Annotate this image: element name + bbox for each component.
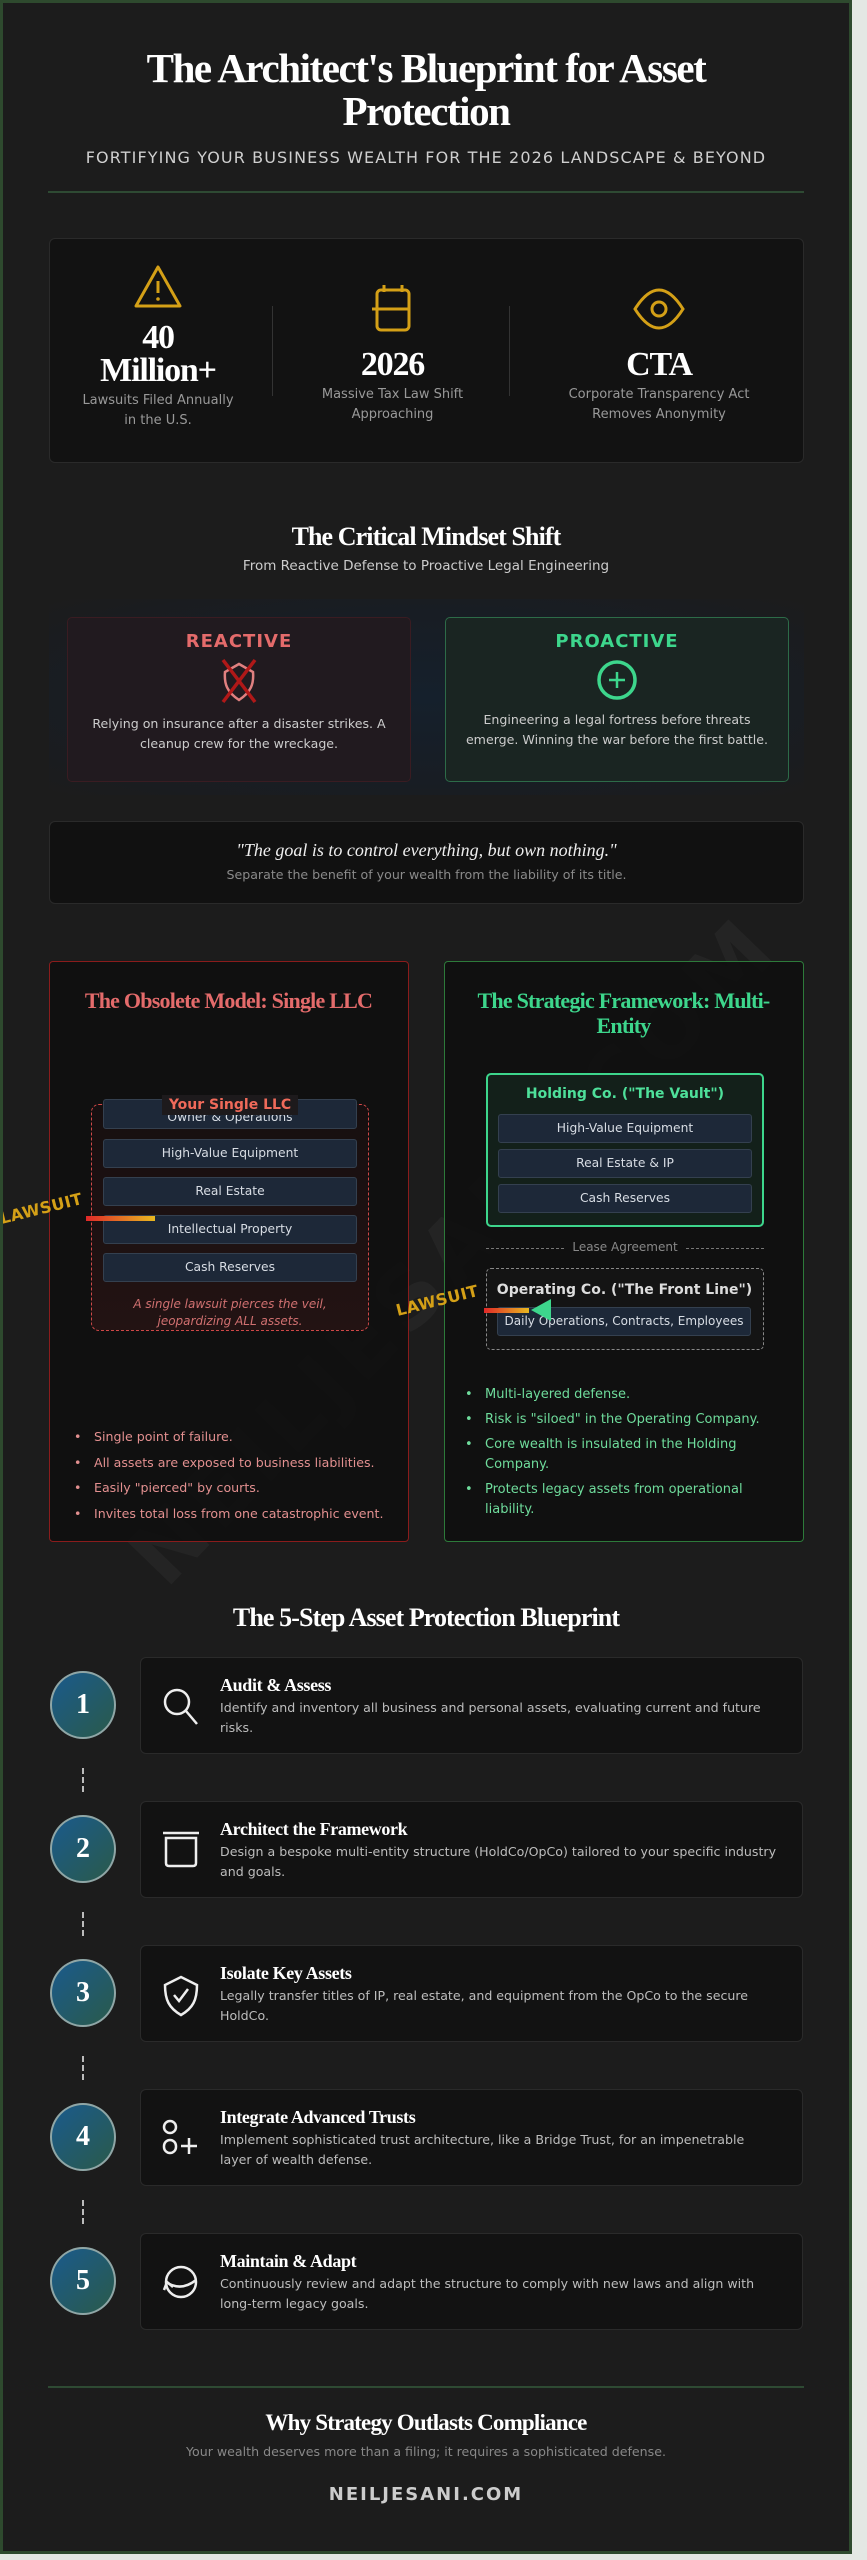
card: reactive: REACTIVE bbox=[186, 631, 292, 652]
card: proactive bbox=[445, 617, 789, 782]
step 3: Isolate Key Assets bbox=[220, 1963, 352, 1983]
icon: frame bbox=[163, 1832, 199, 1868]
callout: quote bbox=[49, 821, 804, 904]
subtitle: FORTIFYING YOUR BUSINESS WEALTH FOR THE 2026 LANDSCAPE & BEYOND bbox=[86, 148, 766, 167]
diagram: single llc: Intellectual Property bbox=[168, 1222, 292, 1236]
step 1: Audit & Assess bbox=[220, 1675, 331, 1695]
arrow: lawsuit left: LAWSUIT bbox=[0, 1189, 84, 1228]
step 4: Implement sophisticated trust architecture, like a Bridge Trust, for an impenetrable bbox=[220, 2132, 744, 2147]
footer subtitle: Your wealth deserves more than a filing; it requires a sophisticated defense. bbox=[186, 2444, 666, 2459]
box: holding co: Holding Co. ("The Vault") bbox=[526, 1086, 724, 1102]
step 5 bbox=[50, 2233, 803, 2330]
step 3: 3 bbox=[76, 1977, 90, 2008]
heading: strategic: The Strategic Framework: Multi- bbox=[478, 988, 769, 1013]
card: reactive: cleanup crew for the wreckage. bbox=[140, 736, 338, 751]
stat: CTA: Removes Anonymity bbox=[592, 407, 726, 422]
arrow: lawsuit left bbox=[0, 1189, 155, 1228]
icon: trust nodes bbox=[162, 2120, 197, 2154]
subheading: mindset: From Reactive Defense to Proactive Legal Engineering bbox=[243, 558, 609, 574]
caption: A single lawsuit pierces the veil, bbox=[133, 1297, 327, 1311]
box: holding co: Cash Reserves bbox=[580, 1191, 670, 1205]
title: Protection bbox=[342, 88, 510, 134]
step 3: HoldCo. bbox=[220, 2008, 269, 2023]
step 1: Identify and inventory all business and personal assets, evaluating current and future bbox=[220, 1700, 761, 1715]
diagram: single llc: Owner & Operations bbox=[167, 1110, 293, 1124]
heading: mindset: The Critical Mindset Shift bbox=[292, 522, 560, 551]
stat: lawsuits bbox=[82, 265, 234, 428]
box: holding co: High-Value Equipment bbox=[557, 1121, 693, 1135]
heading: 5-step: The 5-Step Asset Protection Blueprint bbox=[233, 1603, 619, 1632]
panel: stats bbox=[49, 238, 804, 463]
box: operating co bbox=[486, 1268, 764, 1350]
icon: eye bbox=[633, 288, 685, 330]
step 1 bbox=[50, 1657, 803, 1754]
step 5: 5 bbox=[76, 2265, 90, 2296]
title bbox=[147, 45, 707, 134]
card: proactive: emerge. Winning the war before the first battle. bbox=[466, 732, 768, 747]
bullets: strategic: Multi-layered defense. bbox=[485, 1387, 630, 1402]
bullets: strategic: liability. bbox=[485, 1502, 534, 1517]
step 2 bbox=[50, 1801, 803, 1898]
diagram: single llc: Real Estate bbox=[195, 1184, 265, 1198]
bullets: obsolete: Easily "pierced" by courts. bbox=[94, 1480, 260, 1495]
step 2: Architect the Framework bbox=[220, 1819, 407, 1839]
icon: calendar bbox=[372, 285, 410, 332]
icon: shield check bbox=[164, 1976, 198, 2016]
title: The Architect's Blueprint for Asset bbox=[147, 45, 705, 91]
step 2: 2 bbox=[76, 1833, 90, 1864]
step 4: layer of wealth defense. bbox=[220, 2152, 372, 2167]
stat: CTA: CTA bbox=[626, 346, 692, 383]
step 2: Design a bespoke multi-entity structure (HoldCo/OpCo) tailored to your specific industry bbox=[220, 1844, 776, 1859]
box: operating co: Operating Co. ("The Front Line") bbox=[497, 1282, 752, 1298]
heading: strategic: Entity bbox=[596, 1013, 651, 1038]
stat: CTA: Corporate Transparency Act bbox=[569, 387, 749, 402]
footer heading: Why Strategy Outlasts Compliance bbox=[265, 2410, 587, 2435]
bullets: strategic: Company. bbox=[485, 1457, 549, 1472]
callout: quote: "The goal is to control everything, but own nothing." bbox=[236, 840, 617, 860]
arrow: lawsuit right: LAWSUIT bbox=[394, 1281, 480, 1320]
step 4 bbox=[50, 2089, 803, 2186]
card: reactive: Relying on insurance after a disaster strikes. A bbox=[92, 716, 386, 731]
bullets: strategic: Core wealth is insulated in the Holding bbox=[485, 1437, 736, 1452]
box: holding co: Real Estate & IP bbox=[576, 1156, 674, 1170]
card: proactive: PROACTIVE bbox=[555, 631, 679, 652]
caption: jeopardizing ALL assets. bbox=[158, 1314, 302, 1328]
icon: crossed shield bbox=[222, 659, 256, 703]
step 2: and goals. bbox=[220, 1864, 285, 1879]
step 1: risks. bbox=[220, 1720, 253, 1735]
diagram: single llc: Cash Reserves bbox=[185, 1260, 275, 1274]
diagram: single llc: High-Value Equipment bbox=[162, 1146, 298, 1160]
step 5: long-term legacy goals. bbox=[220, 2296, 368, 2311]
bullets: obsolete: Invites total loss from one catastrophic event. bbox=[94, 1506, 383, 1520]
step 5: Continuously review and adapt the structure to comply with new laws and align with bbox=[220, 2276, 754, 2291]
step 1: 1 bbox=[76, 1689, 90, 1720]
diagram: single llc bbox=[91, 1104, 369, 1331]
icon: plus circle bbox=[597, 660, 637, 700]
stat: lawsuits: 40 bbox=[142, 319, 174, 356]
panel: mindset comparison bbox=[49, 599, 804, 795]
heading: obsolete: The Obsolete Model: Single LLC bbox=[85, 988, 372, 1013]
box: holding co bbox=[486, 1073, 764, 1227]
stat: 2026: 2026 bbox=[361, 346, 424, 383]
bullets: strategic: Risk is "siloed" in the Operating Company. bbox=[485, 1412, 760, 1427]
bullets: obsolete bbox=[76, 1429, 383, 1520]
icon: warning bbox=[134, 265, 182, 308]
watermark: NEILJESANI.COM bbox=[110, 896, 798, 1604]
callout: quote: Separate the benefit of your wealth from the liability of its title. bbox=[226, 867, 627, 882]
label: lease agreement: Lease Agreement bbox=[572, 1240, 678, 1254]
stat: lawsuits: in the U.S. bbox=[124, 413, 192, 428]
arrow: lawsuit right bbox=[394, 1281, 551, 1321]
stat: 2026: Approaching bbox=[352, 407, 433, 422]
panel: strategic framework bbox=[444, 961, 804, 1542]
icon: cycle bbox=[162, 2266, 198, 2298]
caption bbox=[132, 1297, 327, 1328]
step 4: Integrate Advanced Trusts bbox=[220, 2107, 415, 2127]
bullets: obsolete: Single point of failure. bbox=[94, 1429, 233, 1444]
step 5: Maintain & Adapt bbox=[220, 2251, 356, 2271]
stat: lawsuits: Lawsuits Filed Annually bbox=[82, 393, 234, 408]
bullets: obsolete: All assets are exposed to business liabilities. bbox=[94, 1454, 375, 1470]
step 4: 4 bbox=[76, 2121, 90, 2152]
footer brand: NEILJESANI.COM bbox=[329, 2484, 523, 2505]
heading: strategic bbox=[478, 988, 770, 1038]
step 3: Legally transfer titles of IP, real estate, and equipment from the OpCo to the secure bbox=[220, 1988, 748, 2003]
card: proactive: Engineering a legal fortress before threats bbox=[483, 712, 751, 727]
card: reactive bbox=[67, 617, 411, 782]
icon: search bbox=[164, 1688, 198, 1725]
bullets: strategic bbox=[467, 1387, 760, 1517]
stat: CTA bbox=[569, 288, 750, 422]
stat: 2026: Massive Tax Law Shift bbox=[322, 387, 463, 402]
bullets: strategic: Protects legacy assets from operational bbox=[485, 1482, 743, 1497]
step 3 bbox=[50, 1945, 803, 2042]
stat: lawsuits: Million+ bbox=[100, 352, 216, 389]
box: operating co: Daily Operations, Contracts, Employees bbox=[505, 1314, 743, 1328]
panel: obsolete model bbox=[49, 961, 409, 1542]
stat: 2026 bbox=[322, 285, 463, 422]
label: your single llc: Your Single LLC bbox=[169, 1097, 291, 1113]
